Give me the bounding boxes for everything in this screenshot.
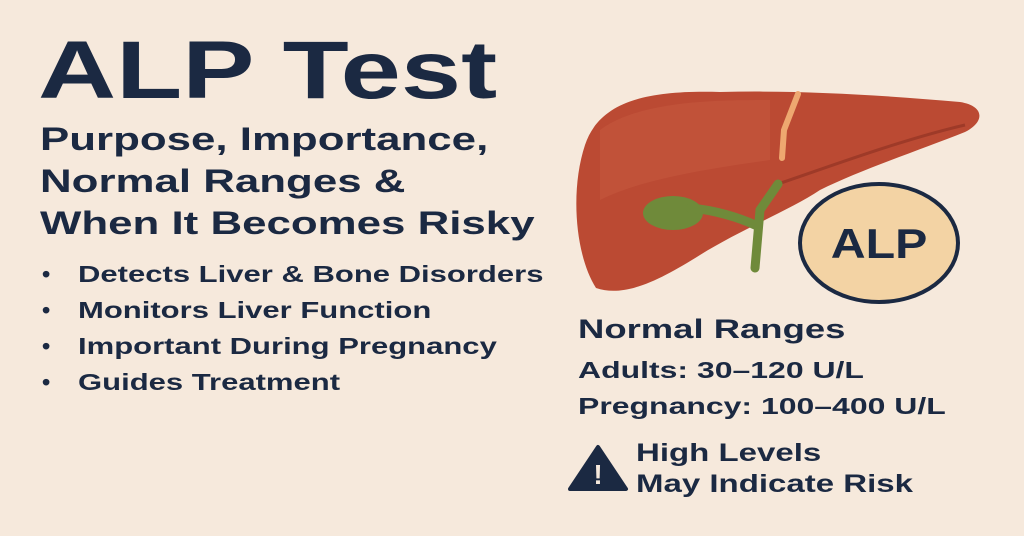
ranges text [578,357,946,419]
bullet list: Monitors Liver Function [78,297,431,323]
bullet list: • [42,261,50,287]
icon: warning: ! [593,459,603,490]
icon: gallbladder [643,184,778,268]
subtitle: When It Becomes Risky [40,205,535,241]
warning text: May Indicate Risk [636,470,913,498]
title: ALP Test [38,25,497,116]
bullet list [42,261,543,395]
ranges text: Pregnancy: 100–400 U/L [578,393,946,419]
icon: warning [570,447,626,490]
bullet list: Detects Liver & Bone Disorders [78,261,543,287]
bullet list: Guides Treatment [78,369,340,395]
normal ranges heading: Normal Ranges [578,314,845,344]
bullet list: Important During Pregnancy [78,333,497,359]
warning text: High Levels [636,439,821,467]
badge: ALP [800,184,958,302]
warning text [636,439,913,498]
subtitle: Purpose, Importance, [40,121,488,157]
subtitle [40,121,535,241]
bullet list: • [42,369,50,395]
bullet list: • [42,297,50,323]
subtitle: Normal Ranges & [40,163,405,199]
bullet list: • [42,333,50,359]
ranges text: Adults: 30–120 U/L [578,357,864,383]
badge: ALP: ALP [831,220,927,267]
